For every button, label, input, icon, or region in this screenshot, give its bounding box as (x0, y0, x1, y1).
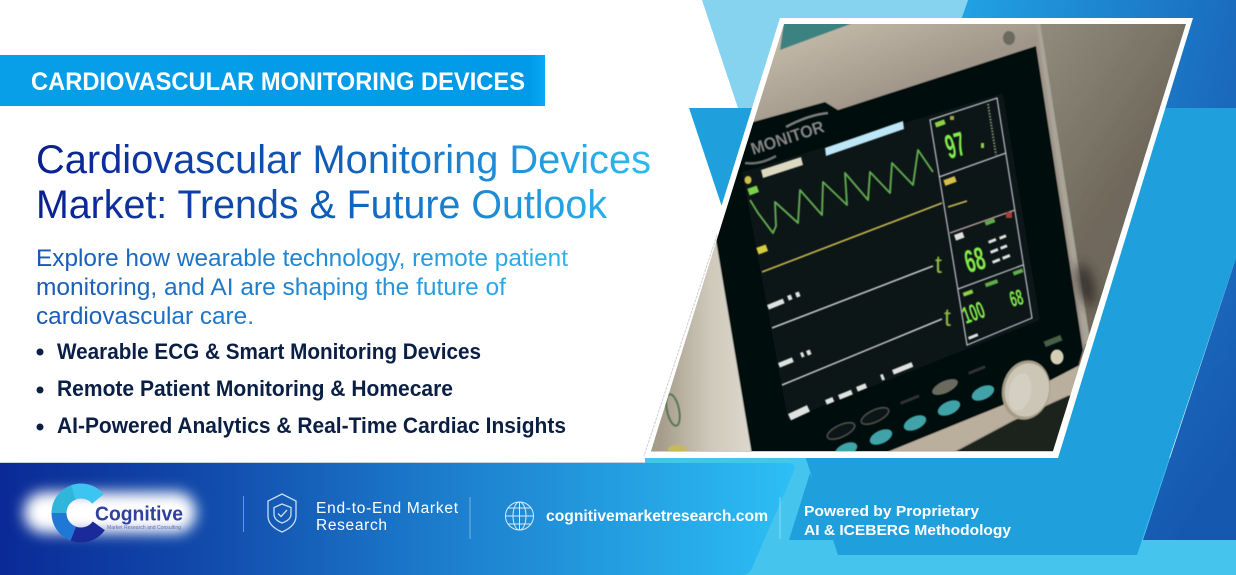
subtitle: monitoring, and AI are shaping the future of (36, 274, 506, 301)
subtitle: Explore how wearable technology, remote patient (36, 245, 568, 272)
photo: patient monitor: t (944, 304, 951, 332)
vital readings: 68 (1007, 284, 1026, 312)
panel tags (1006, 212, 1012, 218)
methodology text: AI & ICEBERG Methodology (804, 522, 1012, 539)
logo ring (59, 491, 99, 535)
bullet list (36, 339, 566, 438)
website url: cognitivemarketresearch.com (546, 508, 768, 525)
frame hairlines (644, 235, 1053, 456)
logo: Cognitive: Market Research and Consulting (107, 525, 181, 531)
footer bar (0, 462, 794, 575)
vital readings: 68 (960, 240, 989, 280)
banner (0, 55, 545, 106)
methodology text: Powered by Proprietary (804, 503, 980, 520)
background: medium blue shape (689, 108, 1236, 555)
banner: CARDIOVASCULAR MONITORING DEVICES (31, 68, 525, 96)
title: Market: Trends & Future Outlook (36, 183, 608, 227)
control buttons (834, 384, 995, 451)
vital readings: 97 (941, 125, 969, 167)
background: footer light blue base (645, 458, 1236, 575)
bullet list: AI-Powered Analytics & Real-Time Cardiac Insights (57, 413, 566, 438)
photo: patient monitor (640, 20, 1200, 461)
icon: shield (268, 494, 296, 532)
monitor status bar (825, 121, 904, 156)
feature: end-to-end (316, 500, 459, 534)
rotary knob (1001, 360, 1050, 420)
methodology text (804, 503, 1012, 539)
feature: end-to-end: End-to-End Market (316, 500, 459, 517)
background: light blue top shape (702, 0, 968, 108)
bullet list: Wearable ECG & Smart Monitoring Devices (57, 339, 481, 364)
photo: patient monitor: t (935, 251, 942, 279)
title: Cardiovascular Monitoring Devices (36, 138, 651, 182)
vital panel frame (930, 98, 1032, 345)
background: top right blue shape (930, 0, 1236, 108)
photo frame (643, 18, 1193, 458)
feature: end-to-end: Research (316, 517, 387, 534)
monitor logo: MONITOR (748, 117, 827, 159)
logo wordmark: Cognitive (95, 504, 183, 526)
background: dark blue right shape (1143, 258, 1236, 540)
background: medium blue footer notch (789, 473, 840, 540)
divider lines (244, 496, 780, 539)
title (36, 138, 651, 227)
ecg waveform (750, 150, 933, 233)
subtitle (36, 245, 568, 330)
subtitle: cardiovascular care. (36, 303, 254, 330)
logo: Cognitive (24, 491, 196, 535)
bullet list: Remote Patient Monitoring & Homecare (57, 376, 453, 401)
vital readings (941, 125, 1026, 330)
logo glow (24, 492, 196, 533)
icon: globe (506, 502, 534, 530)
trace lines (762, 203, 942, 272)
vital readings: 100 (959, 297, 989, 330)
small readouts (767, 232, 1011, 420)
